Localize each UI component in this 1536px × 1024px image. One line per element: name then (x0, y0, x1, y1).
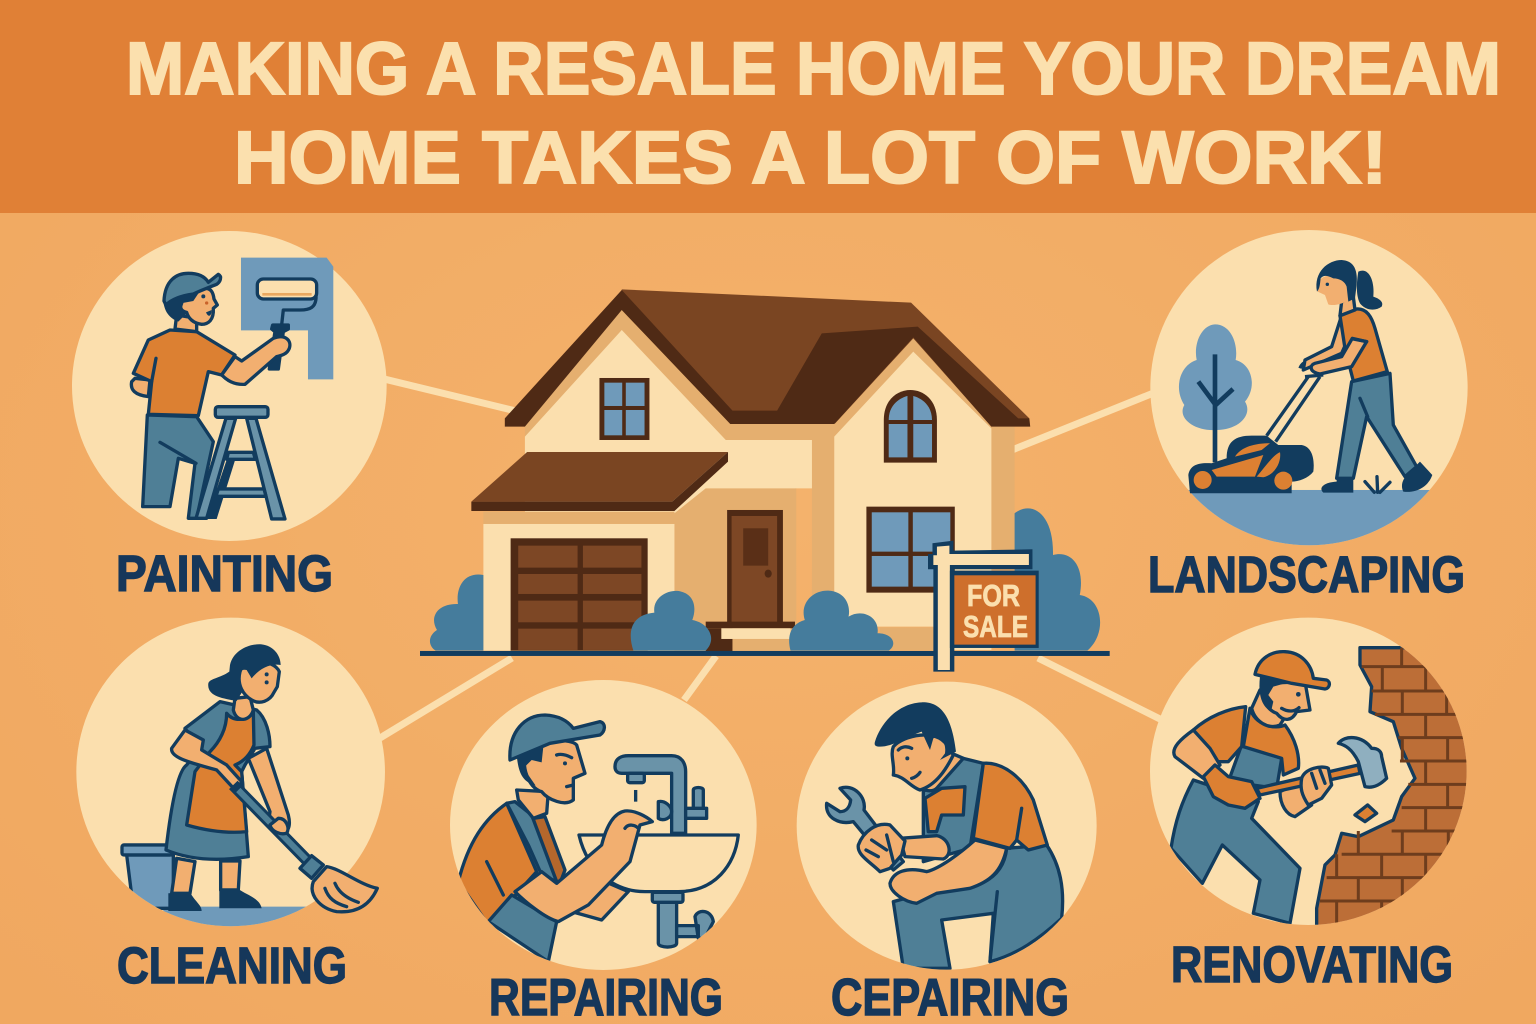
icon: bucket (127, 855, 173, 908)
cream upper wall (525, 330, 812, 513)
house illustration (420, 289, 1110, 672)
lower roof (471, 452, 728, 511)
title: HOME TAKES A LOT OF WORK! (234, 116, 1387, 199)
title (126, 27, 1501, 199)
header band (0, 0, 1536, 213)
panel: wrench repair (797, 682, 1097, 970)
large window (866, 507, 955, 593)
steps (706, 622, 795, 652)
roof dark trim (505, 290, 1030, 427)
icon: sink and pipes (652, 892, 713, 947)
icon: paint roller (257, 279, 317, 369)
icon: painted wall patch (241, 258, 333, 379)
for sale text: SALE (963, 609, 1028, 644)
label: landscaping: LANDSCAPING (1148, 546, 1465, 603)
icon: faucet (615, 756, 707, 833)
painter figure (131, 273, 290, 518)
icon: hammer (1203, 738, 1387, 822)
plumber figure (458, 715, 652, 962)
front door (727, 510, 783, 623)
right wall (834, 337, 991, 627)
right side shadow (989, 427, 1015, 553)
top window (599, 378, 649, 440)
renovator figure (1171, 652, 1329, 923)
icon: grass (1365, 477, 1390, 492)
main roof (622, 289, 1029, 427)
icon: lawn mower (1188, 360, 1323, 493)
panel: renovating (1150, 618, 1472, 927)
tan wall shading (525, 310, 834, 597)
floor (163, 906, 306, 926)
icon: brick wall (1317, 648, 1472, 927)
bushes (430, 508, 1100, 651)
arched window (884, 390, 937, 463)
connector lines (380, 378, 1162, 738)
panel: painting (72, 231, 387, 541)
for sale text: FOR (967, 578, 1020, 613)
mop (233, 785, 310, 863)
ground line (420, 651, 1110, 656)
garage (483, 512, 674, 651)
woman mopping (166, 644, 377, 912)
ground (1188, 490, 1430, 546)
for sale text (963, 578, 1028, 644)
icon: step ladder (196, 407, 285, 519)
porch (674, 488, 796, 627)
label: painting: PAINTING (116, 545, 333, 602)
icon: wrench (827, 787, 903, 870)
panel: cleaning (76, 618, 385, 930)
hand (858, 824, 905, 872)
woman mowing (1303, 260, 1432, 493)
panel: repairing (450, 680, 757, 970)
for sale sign board (928, 541, 1039, 672)
icon: tree (1179, 324, 1252, 462)
panel: landscaping (1145, 230, 1468, 557)
label: renovating: RENOVATING (1171, 936, 1453, 993)
label: cleaning: CLEANING (117, 937, 347, 994)
repair worker figure (875, 702, 1063, 968)
